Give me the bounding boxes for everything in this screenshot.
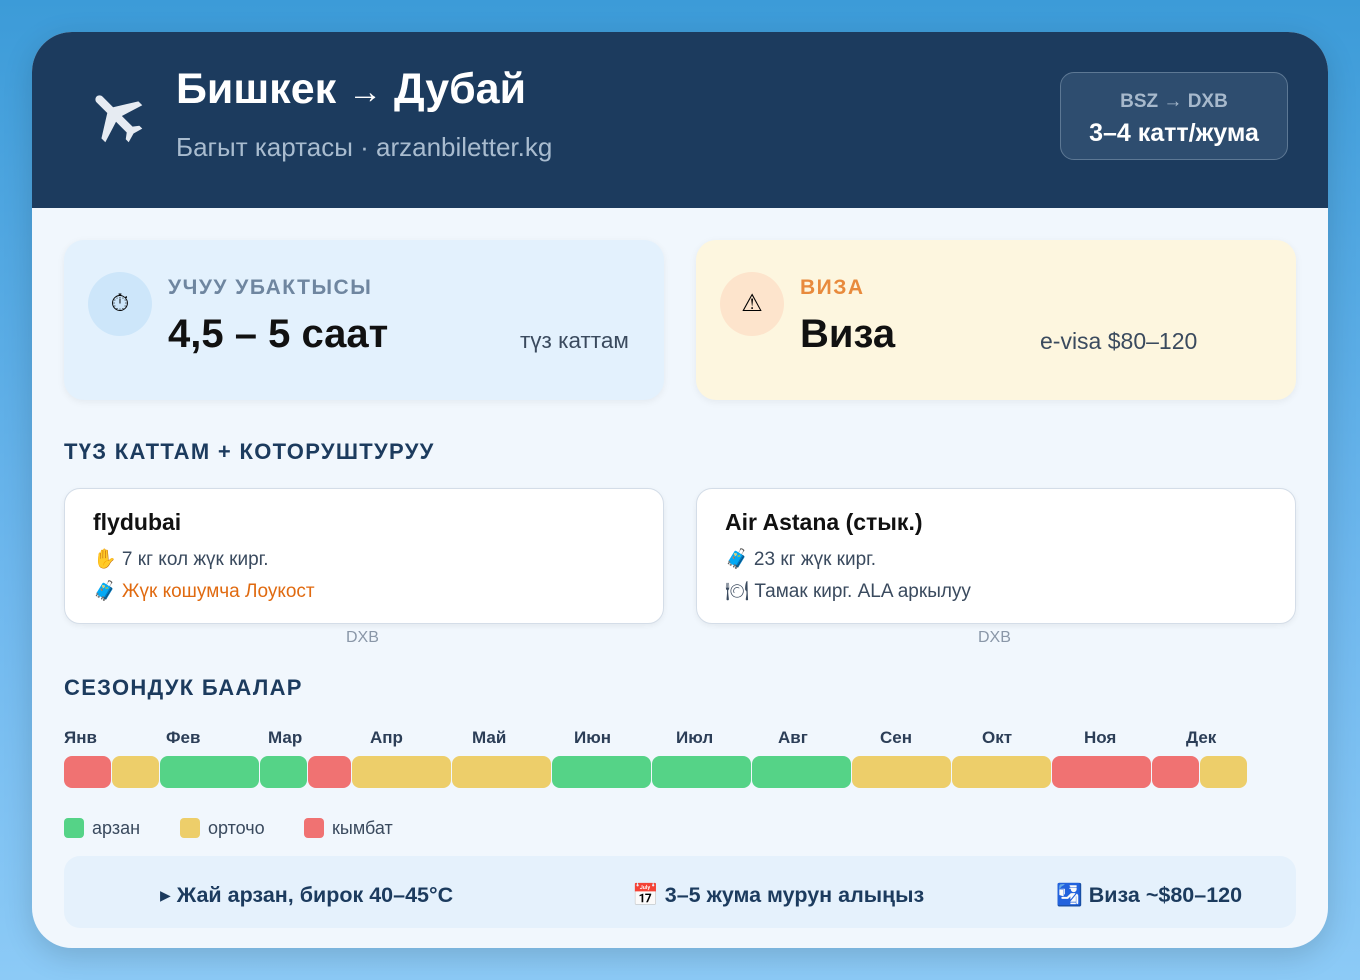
- legend: орточо: [208, 818, 265, 838]
- title: Бишкек → Дубай: [176, 65, 526, 113]
- chart: seasonal bar: Апр: [370, 728, 403, 747]
- chart: seasonal bar: Дек: [1186, 728, 1216, 747]
- heading: seasonal: СЕЗОНДУК БААЛАР: [64, 675, 303, 700]
- chart: seasonal bar: Фев: [166, 728, 200, 747]
- legend: арзан: [92, 818, 140, 838]
- chart: seasonal bar: Окт: [982, 728, 1012, 747]
- chart: seasonal bar: Авг: [778, 728, 808, 747]
- tips bar: [64, 856, 1296, 928]
- icon: stopwatch: ⏱: [111, 290, 129, 317]
- badge: frequency: 3–4 катт/жума: [1089, 119, 1259, 147]
- badge: frequency: [1060, 72, 1288, 160]
- note: e-visa $80–120: [1040, 328, 1197, 354]
- tips bar: 🛂 Виза ~$80–120: [1056, 883, 1242, 907]
- icon: warning: ⚠: [741, 290, 763, 317]
- chart: seasonal bar: Сен: [880, 728, 912, 747]
- panel: Air Astana: 🍽 Тамак кирг. ALA аркылуу: [725, 581, 971, 602]
- tips bar: 📅 3–5 жума мурун алыңыз: [632, 883, 924, 907]
- legend: кымбат: [332, 818, 393, 838]
- badge: frequency: BSZ → DXB: [1120, 91, 1228, 112]
- chart: seasonal bar: Мар: [268, 728, 302, 747]
- header: [32, 32, 1328, 208]
- panel: visa: [696, 240, 1296, 400]
- panel: Air Astana: [696, 488, 1296, 624]
- panel: Air Astana: 🧳 23 кг жүк кирг.: [725, 549, 876, 570]
- icon: stopwatch: [88, 272, 152, 336]
- chart: seasonal bar: Ноя: [1084, 728, 1116, 747]
- chart: seasonal bar: Июн: [574, 728, 611, 747]
- panel: flydubai: flydubai: [93, 509, 181, 535]
- value: Виза: [800, 312, 895, 356]
- label: УЧУУ УБАКТЫСЫ: [168, 276, 372, 299]
- value: 4,5 – 5 саат: [168, 312, 388, 356]
- chart: seasonal bar: [64, 728, 1247, 788]
- heading: airlines: ТҮЗ КАТТАМ + КОТОРУШТУРУУ: [64, 439, 435, 464]
- panel: Air Astana: Air Astana (стык.): [725, 509, 922, 535]
- chart: seasonal bar: Май: [472, 728, 506, 747]
- panel: flydubai: 🧳 Жүк кошумча Лоукост: [93, 581, 315, 602]
- note: түз каттам: [520, 328, 629, 353]
- tips bar: ▸ Жай арзан, бирок 40–45°C: [160, 883, 453, 907]
- panel: flight time: [64, 240, 664, 400]
- label: ВИЗА: [800, 276, 865, 299]
- subtitle: Багыт картасы · arzanbiletter.kg: [176, 132, 552, 162]
- panel: flydubai: ✋ 7 кг кол жүк кирг.: [93, 549, 269, 570]
- panel: flydubai: [64, 488, 664, 624]
- chart: seasonal bar: Янв: [64, 728, 97, 747]
- chart: seasonal bar: Июл: [676, 728, 713, 747]
- label: DXB 2: DXB: [978, 629, 1011, 646]
- label: DXB 1: DXB: [346, 629, 379, 646]
- icon: warning: [720, 272, 784, 336]
- icon: plane: [95, 95, 142, 142]
- legend: [64, 818, 393, 838]
